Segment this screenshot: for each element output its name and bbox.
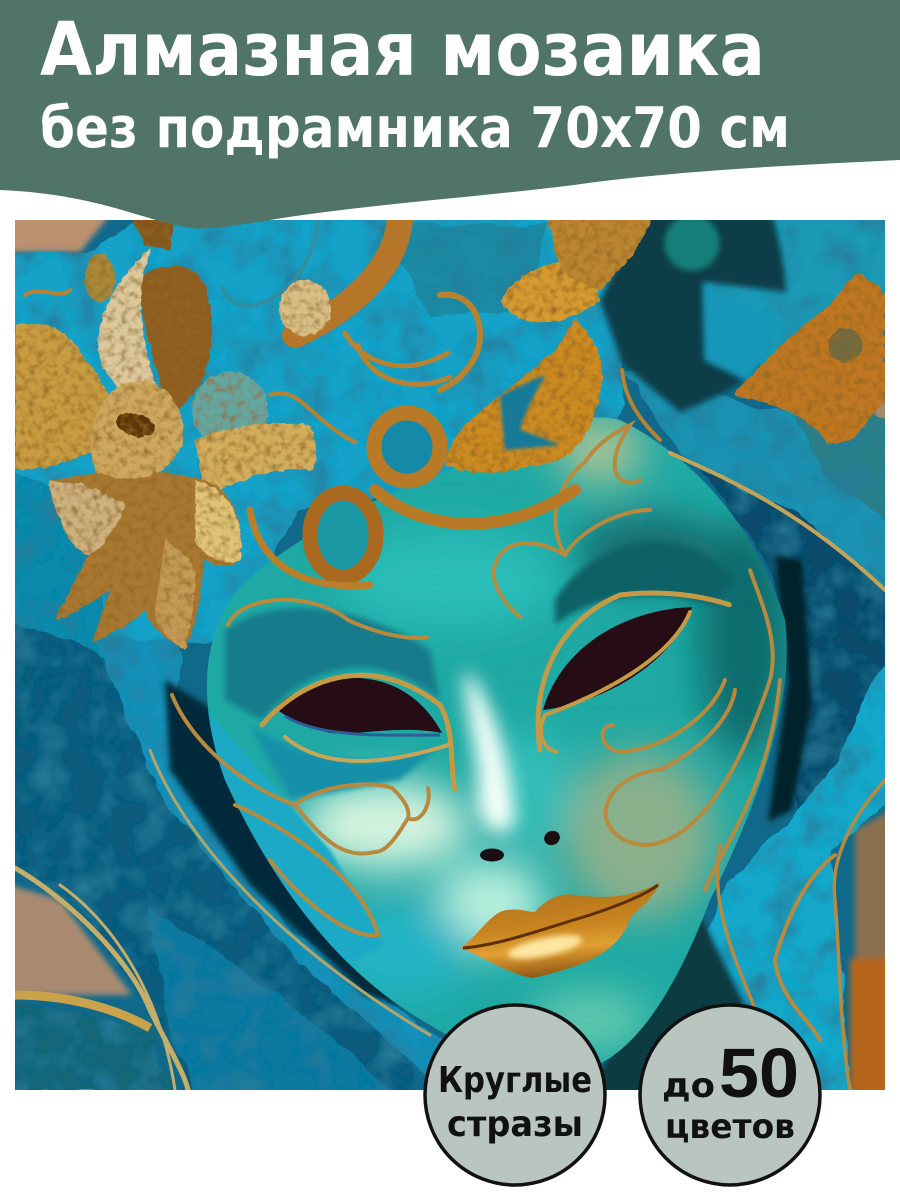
dark flower top right (600, 215, 786, 412)
dark void shadows (165, 555, 812, 1095)
gold headdress scrolls (25, 220, 575, 586)
title line 1: Алмазная мозаика (40, 7, 765, 93)
lips (460, 882, 660, 978)
badge text: Круглые (438, 1060, 592, 1101)
gold flower (15, 247, 316, 650)
mask face (190, 400, 800, 1080)
left eye (275, 678, 442, 735)
gold leaves (85, 215, 652, 473)
nose highlight (465, 670, 515, 832)
title line 2: без подрамника 70х70 см (40, 96, 790, 161)
badge: round rhinestones (425, 1005, 605, 1185)
header banner (0, 0, 900, 228)
badge: up to 50 colours (640, 1005, 820, 1185)
teal cutouts in leaf (500, 375, 560, 450)
gold strip lower left (15, 995, 150, 1028)
label до: до (662, 1066, 715, 1106)
lash band below left eye (250, 725, 440, 800)
lash band right (555, 542, 735, 625)
label цветов: цветов (665, 1107, 795, 1147)
orange leaf top right (733, 273, 885, 445)
right eye (543, 607, 692, 710)
gold filigree (15, 370, 885, 1090)
badge text: стразы (447, 1104, 583, 1145)
mask border strip (208, 710, 382, 964)
nostrils (480, 828, 562, 862)
number 50: 50 (719, 1034, 799, 1112)
face shading (300, 415, 790, 1050)
background tan patches (10, 215, 900, 1100)
cloth: headdress and drapery (10, 215, 900, 1100)
lash band left (225, 608, 440, 720)
picture: venetian mask artwork (10, 215, 900, 1100)
